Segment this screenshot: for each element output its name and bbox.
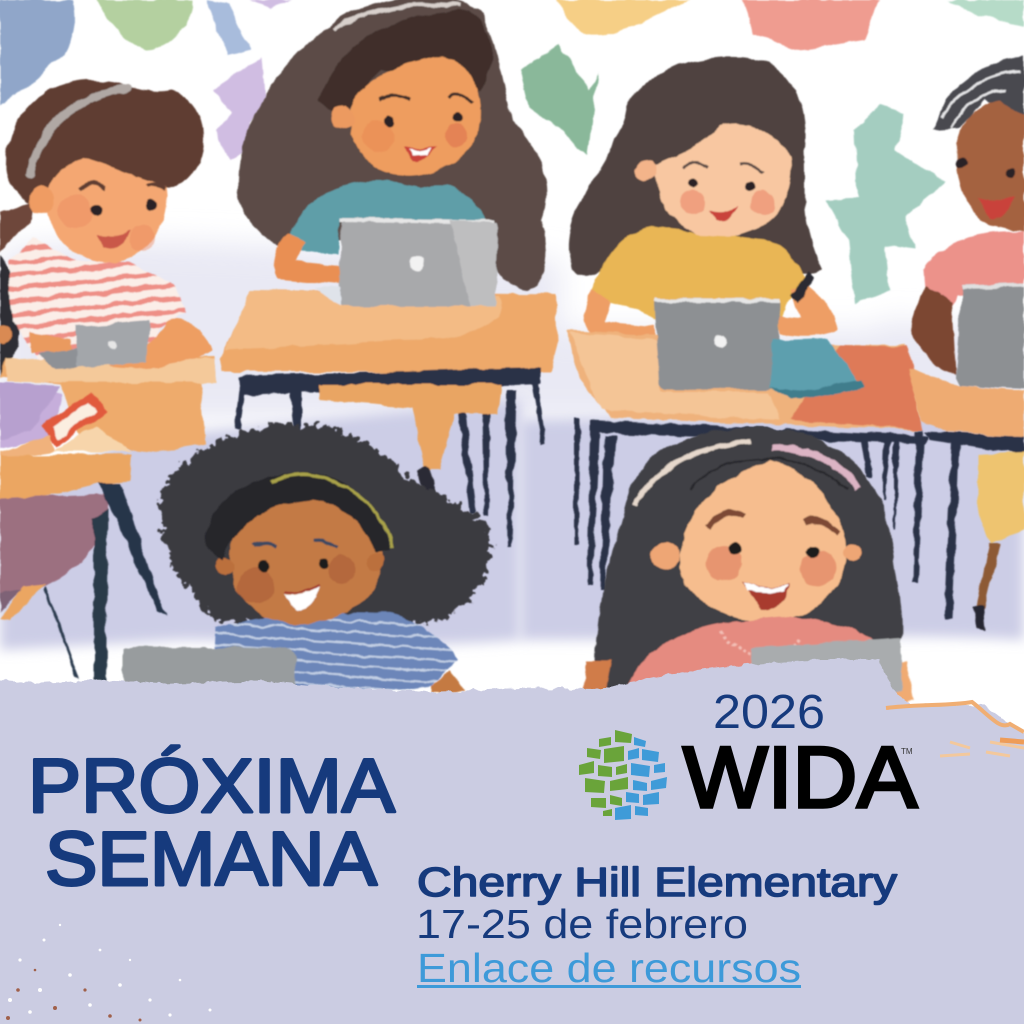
desk <box>0 356 216 452</box>
bottom right girl with long hair <box>583 428 914 710</box>
icon: WIDA logo speech bubbles <box>579 730 667 820</box>
hair fringe <box>640 76 803 170</box>
arm <box>583 660 612 692</box>
striped shirt <box>8 238 186 360</box>
arm <box>273 232 340 284</box>
desk <box>220 290 558 372</box>
bottom panel: lavender torn paper band <box>0 660 1024 1024</box>
laptop <box>654 298 781 390</box>
arm <box>110 320 212 368</box>
top right girl with yellow shirt and laptop <box>568 57 930 592</box>
year label: 2026 <box>713 686 825 739</box>
small laptop <box>76 321 150 368</box>
shirt <box>288 180 486 254</box>
heading: proxima semana: SEMANA <box>45 817 377 902</box>
afro hair <box>159 424 491 626</box>
heading: proxima semana: PRÓXIMA <box>28 744 395 829</box>
arm <box>584 290 654 346</box>
speckled paint texture bottom left <box>6 924 212 1022</box>
laptop <box>124 647 296 690</box>
face <box>230 500 382 624</box>
hair <box>568 57 822 276</box>
book <box>770 338 864 400</box>
face <box>349 56 479 176</box>
hair top <box>206 472 390 560</box>
legs and table frame <box>238 368 540 396</box>
shirt <box>628 616 890 690</box>
school name: Cherry Hill Elementary <box>417 859 898 905</box>
ponytail <box>0 200 36 252</box>
WIDA wordmark: WIDA <box>683 730 918 826</box>
desk <box>568 330 922 430</box>
laptop <box>338 218 498 306</box>
legs <box>590 420 930 444</box>
far right girl with laptop <box>908 56 1024 630</box>
dates: 17-25 de febrero <box>416 901 748 947</box>
face <box>46 158 166 263</box>
laptop <box>956 283 1024 390</box>
trademark mark: TM <box>901 747 913 756</box>
shirt <box>924 232 1024 310</box>
laptop <box>750 638 902 692</box>
resource link: Enlace de recursos <box>417 945 801 991</box>
hair <box>932 56 1024 130</box>
front left desk with card <box>0 382 166 682</box>
foliage decorations along the top <box>0 0 1024 304</box>
hair mass <box>238 0 547 290</box>
bottom left girl with curly afro <box>124 424 491 692</box>
face <box>680 460 846 621</box>
shirt <box>592 226 806 330</box>
far left student fragment <box>0 255 20 378</box>
heading: proxima semana <box>28 744 395 902</box>
left girl with striped shirt at desk <box>0 80 216 452</box>
face <box>654 123 792 237</box>
desk <box>908 368 1024 436</box>
hair <box>595 428 902 690</box>
hair <box>6 80 204 205</box>
shirt <box>210 612 460 690</box>
top centre girl with laptop and teal shirt <box>220 0 558 546</box>
face <box>957 100 1024 232</box>
